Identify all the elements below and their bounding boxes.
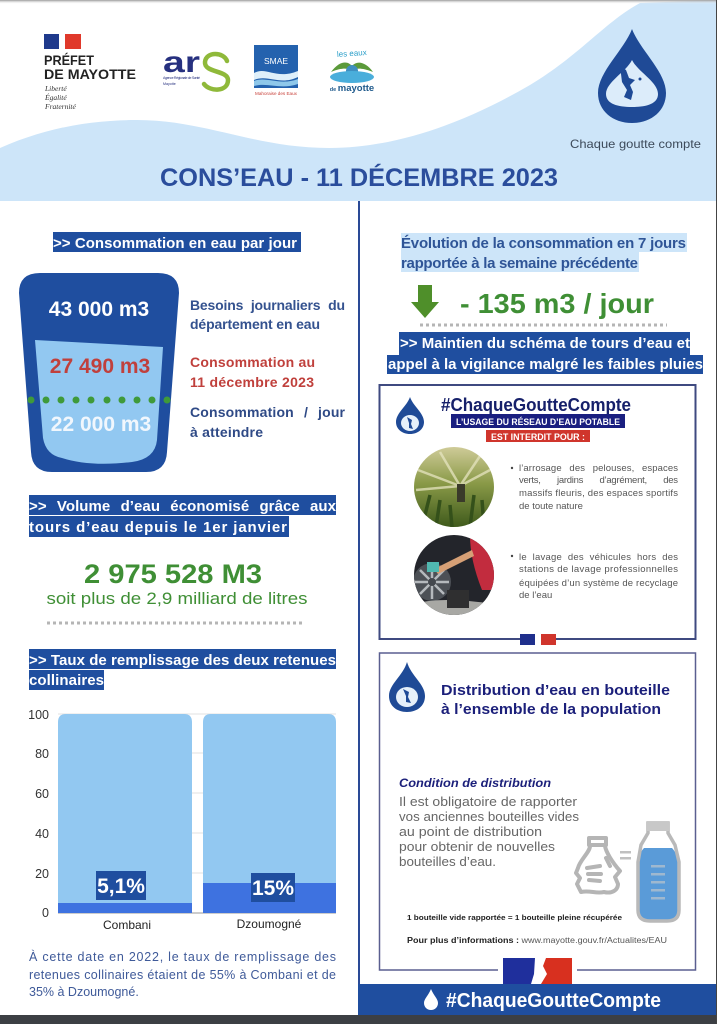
heading: volume économisé: >> Volume d’eau économisé grâce aux [29, 498, 337, 515]
text: lavage: stations de lavage professionnelles [519, 564, 678, 575]
axis labels: 20 [35, 867, 49, 881]
logo: Préfet de Mayotte: Liberté [44, 84, 67, 93]
heading: taux de remplissage [29, 649, 336, 690]
glass chart [19, 273, 179, 472]
glass legend: Consommation / jour [190, 404, 346, 420]
logo: ARS [163, 46, 228, 90]
icon: drop [389, 662, 425, 712]
title: CONS’EAU - 11 DÉCEMBRE 2023 [160, 163, 558, 192]
more info: Pour plus d’informations : www.mayotte.gouv.fr/Actualites/EAU [407, 936, 667, 945]
glass chart: 22 000 m3 [51, 413, 151, 436]
condition text [399, 794, 580, 869]
glass legend [190, 297, 346, 440]
value: -135 m3 / jour: - 135 m3 / jour [460, 288, 654, 319]
logo: Préfet de Mayotte: PRÉFET [44, 52, 94, 68]
axis labels: 80 [35, 747, 49, 761]
icon: small drop [396, 397, 424, 434]
logo: SMAE: SMAE [264, 56, 288, 66]
axis labels: 40 [35, 827, 49, 841]
text: arrosage: massifs fleuris, des espaces sportifs [519, 488, 678, 499]
footer band: #ChaqueGoutteCompte [446, 990, 661, 1012]
heading: maintien: appel à la vigilance malgré les faibles pluies [388, 356, 703, 373]
text: lavage [511, 552, 678, 601]
text: arrosage: l’arrosage des pelouses, espaces [519, 463, 678, 474]
icon: equals sign [620, 851, 631, 860]
condition text: au point de distribution [399, 824, 542, 839]
heading: consommation: >> Consommation en eau par jour [53, 235, 297, 252]
logo: les eaux de Mayotte: les eaux [337, 48, 367, 59]
chart note: retenues collinaires étaient de 55% à Combani et de [29, 968, 336, 982]
panel title [441, 682, 670, 718]
glass legend: à atteindre [190, 424, 263, 440]
icon: large flag [498, 955, 577, 984]
axis labels: 0 [42, 906, 49, 920]
text: arrosage [511, 463, 678, 512]
logo: les eaux de Mayotte [330, 48, 374, 94]
text: lavage: de l’eau [519, 590, 552, 601]
glass legend: département en eau [190, 316, 320, 332]
column divider [358, 201, 360, 985]
glass chart: 27 490 m3 [50, 355, 150, 378]
photo: car wash [413, 535, 494, 615]
axis labels: 60 [35, 787, 49, 801]
heading: évolution: rapportée à la semaine précédente [401, 255, 638, 272]
panel heading: #ChaqueGoutteCompte [441, 395, 631, 415]
panel: usage interdit [380, 385, 696, 645]
bar: Dzoumogné [203, 714, 336, 931]
glass legend: 11 décembre 2023 [190, 374, 314, 390]
condition heading: Condition de distribution [399, 776, 551, 790]
icon: green down arrow [411, 285, 439, 318]
condition text: bouteilles d’eau. [399, 854, 496, 869]
text: arrosage: de toute nature [519, 501, 583, 512]
viewer bottom bar [0, 1015, 717, 1024]
condition text: pour obtenir de nouvelles [399, 839, 556, 854]
panel: distribution [380, 653, 696, 984]
chart note [29, 949, 336, 999]
heading: volume économisé [29, 495, 337, 537]
logo: Préfet de Mayotte: Égalité [44, 92, 67, 102]
logo: ARS: ar [163, 46, 200, 79]
heading: évolution [401, 233, 687, 272]
text: arrosage: verts, jardins d’agrément, des [519, 475, 678, 486]
header wave background [0, 0, 717, 201]
big number subtitle: soit plus de 2,9 milliard de litres [46, 589, 308, 608]
footer band [358, 984, 716, 1015]
bar: Combani [58, 714, 192, 932]
logo: les eaux de Mayotte: de mayotte [330, 83, 374, 94]
text: lavage: le lavage des véhicules hors des [519, 552, 678, 563]
bar: Combani: Combani [103, 918, 151, 932]
target dotted line [28, 396, 170, 404]
glass legend: Besoins journaliers du [190, 297, 345, 313]
bar: Dzoumogné: 15% [252, 877, 294, 900]
chart note: À cette date en 2022, le taux de remplissage des [29, 949, 336, 964]
equivalence note: 1 bouteille vide rapportée = 1 bouteille pleine récupérée [407, 913, 622, 922]
logo: SMAE [254, 45, 298, 96]
panel title: à l’ensemble de la population [441, 701, 661, 718]
logo: Préfet de Mayotte: Fraternité [44, 102, 76, 111]
logo: SMAE: Mahoraise des Eaux [255, 91, 298, 96]
heading: maintien: >> Maintien du schéma de tours d’eau et [400, 335, 690, 352]
banner: interdit: EST INTERDIT POUR : [491, 432, 585, 442]
logo: Préfet de Mayotte [44, 34, 136, 111]
heading: taux de remplissage: >> Taux de remplissage des deux retenues [29, 652, 336, 669]
heading: évolution: Évolution de la consommation en 7 jours [401, 235, 686, 252]
icon: flag [520, 634, 556, 645]
axis labels: 100 [28, 708, 49, 722]
heading: volume économisé: tours d’eau depuis le 1er janvier [29, 519, 287, 536]
bar: Combani: 5,1% [97, 875, 145, 898]
icon: full bottle [638, 822, 679, 921]
condition text: vos anciennes bouteilles vides [399, 809, 580, 824]
icon: crushed bottle [576, 838, 620, 893]
chart note: 35% à Dzoumogné. [29, 985, 139, 999]
photo: sprinkler on lawn [414, 447, 494, 527]
logo: Préfet de Mayotte: DE MAYOTTE [44, 66, 136, 82]
heading: taux de remplissage: collinaires [29, 672, 104, 689]
big number: 2 975 528 M3 [84, 559, 262, 589]
bar chart [28, 708, 336, 932]
logo: big water drop [598, 29, 666, 123]
glass legend: Consommation au [190, 354, 315, 370]
axis labels [28, 708, 49, 920]
condition text: Il est obligatoire de rapporter [399, 794, 578, 809]
logo: ARS: Agence Régionale de Santé [163, 76, 200, 80]
glass chart: 43 000 m3 [49, 298, 149, 321]
heading: maintien [387, 332, 703, 374]
panel title: Distribution d’eau en bouteille [441, 682, 670, 699]
text: lavage: équipées d’un système de recyclage [519, 578, 678, 589]
bar: Dzoumogné: Dzoumogné [237, 917, 302, 931]
banner: usage [451, 414, 625, 428]
banner: usage: L’USAGE DU RÉSEAU D’EAU POTABLE [456, 417, 620, 427]
slogan: Chaque goutte compte: Chaque goutte compte [570, 137, 701, 151]
logo: ARS: Mayotte [163, 82, 176, 86]
